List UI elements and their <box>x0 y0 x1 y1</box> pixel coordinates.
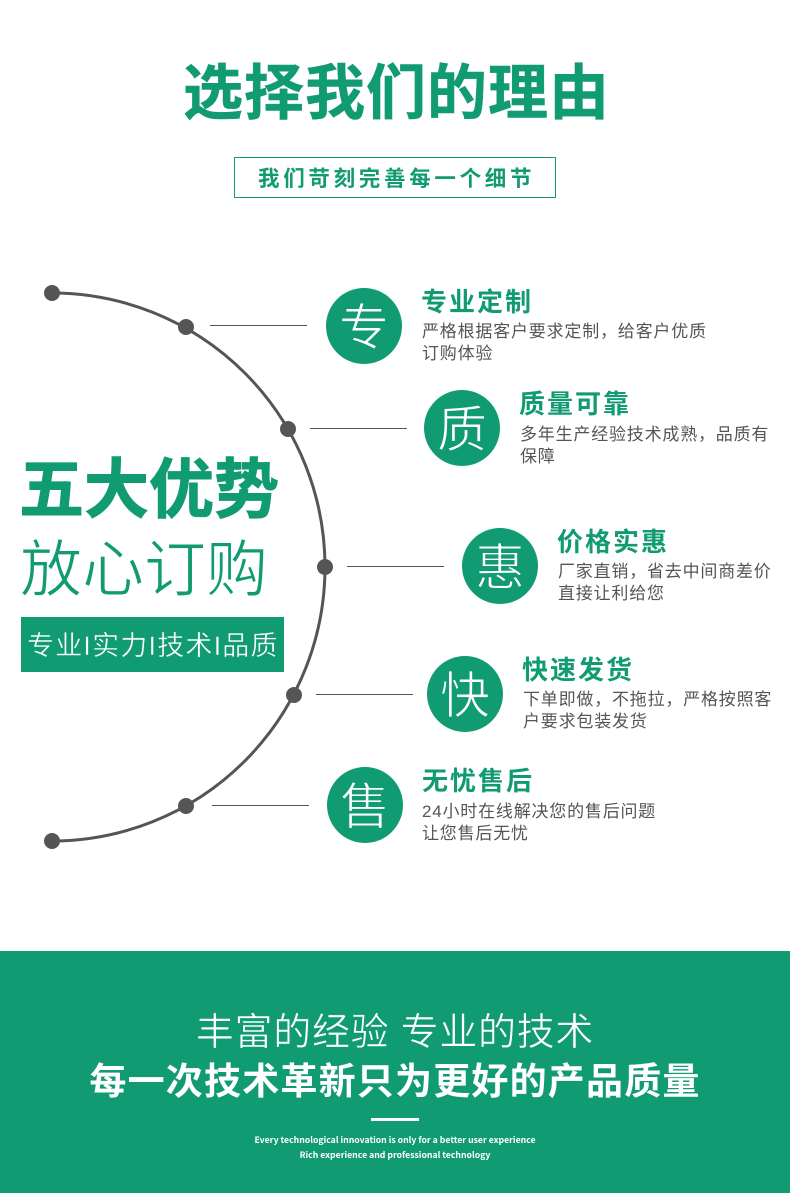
footer band <box>0 951 790 1193</box>
curved timeline <box>44 285 333 849</box>
icon: 快 <box>427 656 503 732</box>
item text: 24小时在线解决您的售后问题 <box>422 802 656 821</box>
footer line 1: 丰富的经验 专业的技术 <box>196 1012 594 1054</box>
left banner <box>21 617 284 672</box>
item text: 下单即做，不拖拉，严格按照客 <box>523 690 772 709</box>
icon: 专: 专 <box>339 300 389 356</box>
item heading: 无忧售后 <box>422 766 534 796</box>
icon: 惠 <box>462 528 538 604</box>
item text <box>520 425 769 466</box>
banner text: 专业I实力I技术I品质 <box>27 631 279 661</box>
item text: 直接让利给您 <box>558 584 665 603</box>
item text: 厂家直销，省去中间商差价 <box>558 562 772 581</box>
item: quality <box>310 389 769 466</box>
icon: 售 <box>327 767 403 843</box>
title: 选择我们的理由 <box>183 60 610 127</box>
item: price <box>347 527 772 604</box>
left subheading: 放心订购 <box>20 536 268 605</box>
icon: 专 <box>326 288 402 364</box>
item text <box>523 690 772 731</box>
item text: 让您售后无忧 <box>422 824 529 843</box>
item text: 户要求包装发货 <box>523 712 648 731</box>
item text: 多年生产经验技术成熟，品质有 <box>520 425 769 444</box>
item heading: 快速发货 <box>522 655 634 685</box>
item text <box>422 802 656 843</box>
subtitle text: 我们苛刻完善每一个细节 <box>258 167 535 191</box>
left heading: five advantages: 五大优势 <box>19 453 279 526</box>
footer divider <box>371 1118 419 1121</box>
icon: 惠: 惠 <box>475 540 525 596</box>
item: shipping <box>316 655 772 732</box>
item text <box>558 562 772 603</box>
item heading: 专业定制 <box>421 287 533 317</box>
subtitle box <box>234 157 556 198</box>
footer english 2: Rich experience and professional technology <box>300 1148 490 1161</box>
icon: 质 <box>424 390 500 466</box>
footer line 2: 每一次技术革新只为更好的产品质量 <box>89 1061 701 1102</box>
item text: 严格根据客户要求定制，给客户优质 <box>422 322 707 341</box>
footer english 1: Every technological innovation is only for a better user experience <box>254 1133 536 1146</box>
item text: 保障 <box>520 447 556 466</box>
item text: 订购体验 <box>422 344 493 363</box>
item heading: 质量可靠 <box>519 389 631 419</box>
item heading: 价格实惠 <box>557 527 669 557</box>
item: custom <box>210 287 707 364</box>
item text <box>422 322 707 363</box>
icon: 质: 质 <box>437 402 487 458</box>
icon: 售: 售 <box>340 779 390 835</box>
icon: 快: 快 <box>440 668 490 724</box>
item: after sales <box>212 766 656 843</box>
